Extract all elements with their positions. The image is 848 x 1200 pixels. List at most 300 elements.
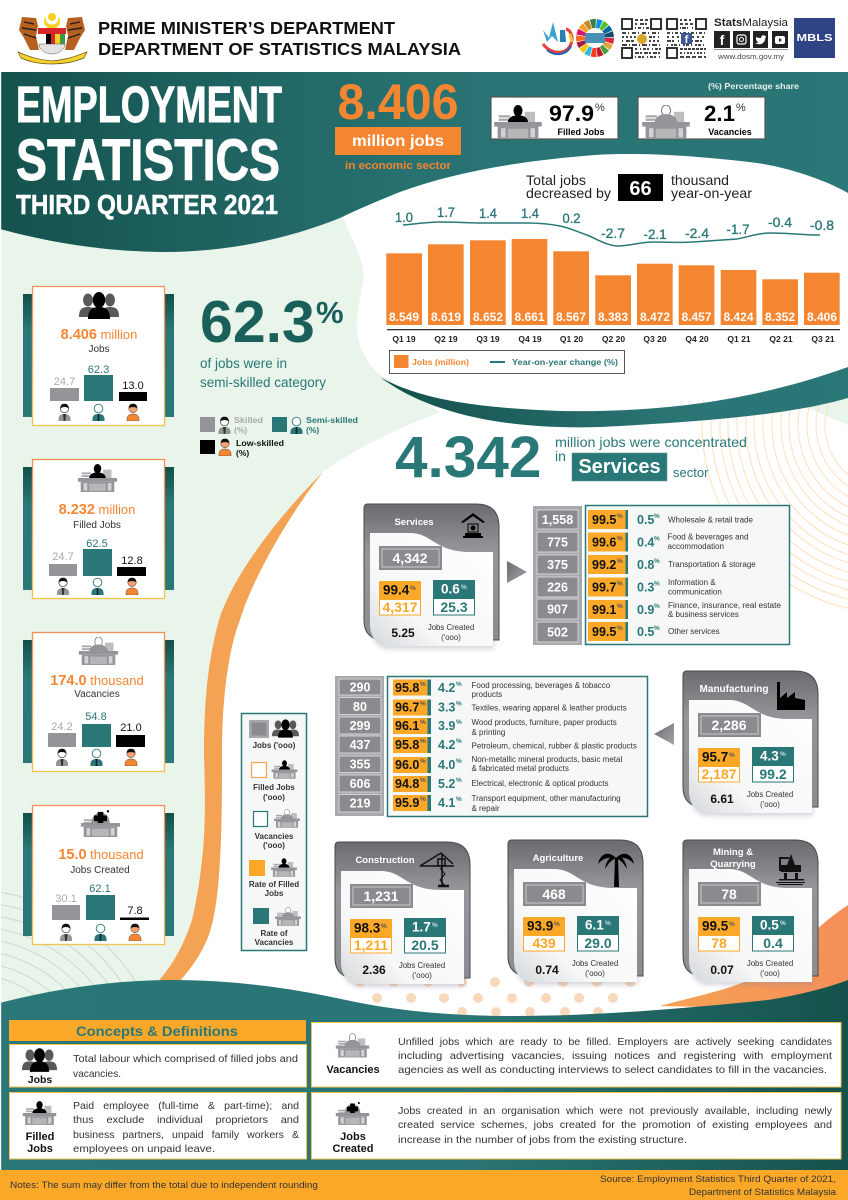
skill legend: (%) xyxy=(236,448,249,458)
card: jobs: 24.7 xyxy=(54,376,75,388)
panel: construction card: 98.3 xyxy=(354,920,381,936)
callout: total jobs decreased: decreased by xyxy=(526,185,611,201)
panel: agriculture card: 468 xyxy=(542,886,566,902)
panel: agriculture card: % xyxy=(605,920,611,927)
callout: semi-skilled share xyxy=(200,289,344,390)
icon: crane xyxy=(420,853,454,886)
panel: services card: 4,342 xyxy=(392,550,428,566)
panel: agriculture card: 93.9 xyxy=(527,918,553,934)
table: services sub-sectors: 0.4 xyxy=(637,536,654,550)
table: manufacturing sub-sectors: Non-metallic mineral products, basic metal xyxy=(472,755,622,764)
definition: filled jobs: Filled xyxy=(26,1131,54,1143)
table: services sub-sectors: % xyxy=(617,536,623,542)
bar chart: jobs by quarter: 8.619 xyxy=(431,312,461,324)
callout: semi-skilled share: 62.3 xyxy=(200,289,315,355)
table: manufacturing sub-sectors: Transport equipment, other manufacturing xyxy=(472,794,621,803)
peach dots xyxy=(355,977,635,1017)
card: jobs: 13.0 xyxy=(122,380,144,392)
chart legend: Jobs (million) xyxy=(412,357,469,367)
table: manufacturing sub-sectors: % xyxy=(420,681,426,688)
chart legend xyxy=(390,350,624,374)
panel: construction card: ('ooo) xyxy=(412,971,432,980)
table: services sub-sectors: communication xyxy=(668,588,722,596)
table: manufacturing sub-sectors: % xyxy=(456,758,462,765)
panel: vacancies share xyxy=(638,97,765,139)
line chart: year-on-year change: 1.0 xyxy=(395,209,413,225)
table: services sub-sectors: Food & beverages and xyxy=(668,532,748,542)
footer band: Notes: The sum may differ from the total due to independent rounding xyxy=(10,1180,318,1191)
definition: jobs created: Jobs xyxy=(340,1131,366,1143)
bar chart: jobs by quarter: Q3 21 xyxy=(811,334,835,344)
table: services sub-sectors: 0.8 xyxy=(637,558,654,572)
table: manufacturing sub-sectors: 96.1 xyxy=(395,719,419,733)
table: manufacturing sub-sectors: 96.0 xyxy=(395,758,419,772)
callout: total jobs decreased: Total jobs xyxy=(526,172,586,188)
table: manufacturing sub-sectors: 96.7 xyxy=(395,700,419,714)
table: services sub-sectors: % xyxy=(654,558,660,565)
table: services jobs column xyxy=(533,506,582,645)
card: jobs created: 15.0 thousand xyxy=(58,847,144,863)
panel: manufacturing card: % xyxy=(780,751,786,758)
card: jobs: 8.406 million xyxy=(61,327,137,343)
definition: jobs created: created service schemes, jobs created for the promotion of existing employees and xyxy=(398,1120,832,1131)
callout: total jobs decreased: year-on-year xyxy=(671,185,752,201)
concepts heading xyxy=(9,1020,306,1041)
card: jobs xyxy=(23,286,174,426)
title: THIRD QUARTER 2021 xyxy=(16,189,278,220)
bar chart: jobs by quarter: 8.549 xyxy=(389,312,419,324)
card: vacancies: 54.8 xyxy=(85,711,107,723)
StatsMalaysia social block xyxy=(714,17,789,61)
definition: jobs: vacancies. xyxy=(73,1069,121,1080)
bar chart: jobs by quarter xyxy=(386,239,840,344)
table: services sub-sectors: % xyxy=(654,513,660,520)
bar chart: jobs by quarter: Q2 20 xyxy=(602,334,625,344)
table: services sub-sectors: % xyxy=(654,580,660,588)
panel: agriculture card: ('ooo) xyxy=(585,969,605,978)
card: vacancies: 24.2 xyxy=(51,721,73,733)
legend: jobs symbols: Filled Jobs xyxy=(253,783,295,792)
table: manufacturing sub-sectors: % xyxy=(456,796,462,803)
panel: mining card xyxy=(683,840,818,982)
definition: filled jobs: Jobs xyxy=(27,1143,53,1155)
light green corner right xyxy=(790,385,848,425)
panel: agriculture card: 439 xyxy=(532,935,556,951)
table: services sub-sectors: % xyxy=(617,580,623,588)
legend: jobs symbols: Rate of Filled xyxy=(249,880,299,889)
legend: jobs symbols: Vacancies xyxy=(255,832,294,841)
line chart: year-on-year change: 1.4 xyxy=(479,205,497,221)
panel: manufacturing card: 2,187 xyxy=(701,766,737,782)
grey concentric arcs xyxy=(0,892,148,1005)
icon: QR code facebook: f xyxy=(685,34,689,46)
panel: vacancies share: % xyxy=(736,102,746,114)
table: manufacturing sub-sectors: & fabricated metal products xyxy=(472,764,569,773)
panel: services card xyxy=(364,504,499,646)
teal swoosh xyxy=(380,367,848,427)
panel: manufacturing card: 4.3 xyxy=(760,748,779,764)
icon: SDG centre xyxy=(585,33,605,43)
table: manufacturing sub-sectors: products xyxy=(472,690,502,699)
icon: QR code facebook xyxy=(667,19,706,58)
definition: jobs created xyxy=(312,1092,841,1159)
skill legend: (%) xyxy=(234,425,247,435)
panel: services card: 99.4 xyxy=(383,582,410,598)
bar chart: jobs by quarter: Q1 20 xyxy=(560,334,583,344)
percentage share note: (%) Percentage share xyxy=(708,81,799,91)
card: filled jobs: 8.232 million xyxy=(59,502,135,518)
line chart: year-on-year change: -2.1 xyxy=(644,226,667,242)
panel: services card: 5.25 xyxy=(391,626,415,640)
bar chart: jobs by quarter: 8.383 xyxy=(598,312,628,324)
footer band: Source: Employment Statistics Third Quarter of 2021, xyxy=(600,1174,836,1185)
callout: services concentration: in xyxy=(555,448,566,464)
table: services sub-sectors: % xyxy=(617,625,623,632)
legend: jobs symbols: Jobs xyxy=(265,889,284,898)
table: services jobs column: 375 xyxy=(547,558,568,572)
icon: coat of arms xyxy=(18,12,87,64)
panel: construction card: 1.7 xyxy=(412,920,431,934)
table: manufacturing sub-sectors: % xyxy=(456,738,462,745)
panel: services card: Jobs Created xyxy=(428,623,474,632)
icon: vision logo xyxy=(543,22,572,54)
table: manufacturing sub-sectors: 95.9 xyxy=(395,796,419,810)
table: manufacturing sub-sectors: % xyxy=(420,796,426,803)
definition: filled jobs: Paid employee (full-time & part-time); and xyxy=(73,1101,299,1112)
table: manufacturing sub-sectors: % xyxy=(456,777,462,784)
icon: MBLS logo: MBLS xyxy=(796,32,832,44)
line chart: year-on-year change: 1.4 xyxy=(521,205,539,221)
panel: vacancies share: Vacancies xyxy=(708,127,752,137)
table: manufacturing sub-sectors: 4.0 xyxy=(438,758,455,772)
definition: vacancies: agencies as well as conducting interviews to select candidates to fill in the vacancies. xyxy=(398,1065,827,1076)
headline jobs number: million jobs xyxy=(352,133,444,150)
panel: manufacturing card: ('ooo) xyxy=(760,800,780,809)
panel: construction card: 2.36 xyxy=(362,963,386,977)
table: manufacturing sub-sectors: & repair xyxy=(472,804,500,813)
table: services jobs column: 1,558 xyxy=(542,513,573,527)
bar chart: jobs by quarter: 8.352 xyxy=(765,312,795,324)
skill legend: (%) xyxy=(306,425,319,435)
footer band: Department of Statistics Malaysia xyxy=(689,1187,837,1198)
panel: manufacturing card: 6.61 xyxy=(710,792,734,806)
table: manufacturing sub-sectors: % xyxy=(456,719,462,726)
table: services sub-sectors: % xyxy=(654,536,660,542)
table: services sub-sectors: Finance, insurance, real estate xyxy=(668,601,782,610)
table: manufacturing jobs column: 437 xyxy=(350,738,370,752)
table: manufacturing sub-sectors: 95.8 xyxy=(395,681,419,695)
line chart: year-on-year change: -0.4 xyxy=(768,214,792,230)
card: filled jobs: 24.7 xyxy=(52,551,74,563)
panel: mining card: 0.4 xyxy=(763,935,783,951)
panel: services card: % xyxy=(410,585,416,592)
table: services jobs column: 226 xyxy=(547,580,568,594)
bar chart: jobs by quarter: Q2 19 xyxy=(434,334,458,344)
legend: jobs symbols: Vacancies xyxy=(255,938,294,947)
arrow: manufacturing to breakdown xyxy=(654,723,674,745)
panel: construction card: 20.5 xyxy=(411,937,439,953)
title: EMPLOYMENT xyxy=(16,76,282,133)
definition: filled jobs xyxy=(10,1092,306,1159)
card: vacancies: 174.0 thousand xyxy=(50,673,144,689)
definition: vacancies xyxy=(312,1022,841,1087)
top teal banner xyxy=(0,72,848,252)
table: services sub-sectors: 99.2 xyxy=(592,558,616,572)
table: manufacturing sub-sectors: Electrical, electronic & optical products xyxy=(472,779,608,788)
line chart: year-on-year change: 0.2 xyxy=(562,210,581,226)
table: manufacturing sub-sectors: 94.8 xyxy=(395,777,419,791)
title: STATISTICS xyxy=(16,128,280,193)
panel: mining card: 0.07 xyxy=(710,963,734,977)
table: services sub-sectors: 99.5 xyxy=(592,625,616,639)
panel: agriculture card: Jobs Created xyxy=(572,959,618,968)
legend: jobs symbols: Jobs ('ooo) xyxy=(253,741,296,750)
panel: agriculture card: 29.0 xyxy=(584,935,612,951)
header title xyxy=(98,18,461,59)
table: manufacturing sub-sectors: 3.9 xyxy=(438,719,455,733)
panel: manufacturing card xyxy=(683,671,818,813)
table: manufacturing sub-sectors: % xyxy=(420,700,426,708)
table: manufacturing sub-sectors: 95.8 xyxy=(395,738,419,752)
table: services sub-sectors: % xyxy=(617,513,623,520)
bar chart: jobs by quarter: Q3 19 xyxy=(476,334,500,344)
callout: services concentration: sector xyxy=(673,465,709,480)
definition: jobs created: increase in the number of jobs from the existing structure. xyxy=(398,1135,687,1146)
panel: filled jobs share xyxy=(491,97,618,139)
line chart: year-on-year change: -0.8 xyxy=(810,217,834,233)
table: services sub-sectors: 0.3 xyxy=(637,580,654,594)
footer band xyxy=(0,1170,848,1200)
table: manufacturing sub-sectors: Petroleum, chemical, rubber & plastic products xyxy=(472,742,637,750)
card: jobs created: 62.1 xyxy=(89,883,111,895)
table: manufacturing sub-sectors: & printing xyxy=(472,728,505,737)
table: manufacturing jobs column: 80 xyxy=(353,700,367,714)
table: manufacturing sub-sectors: 3.3 xyxy=(438,700,455,714)
orange bump bottom right xyxy=(660,905,848,1010)
definition: filled jobs: business partners, unpaid family workers & xyxy=(73,1130,299,1141)
bar chart: jobs by quarter: Q1 21 xyxy=(727,334,751,344)
legend: jobs symbols: Rate of xyxy=(260,929,288,938)
definition: jobs created: Created xyxy=(333,1143,373,1155)
panel: mining card: 0.5 xyxy=(760,918,779,932)
table: services jobs column: 907 xyxy=(547,602,568,616)
definition: vacancies: including advertising vacancies, issuing notices and registering with employment xyxy=(398,1051,832,1062)
table: manufacturing sub-sectors: 4.2 xyxy=(438,738,455,752)
table: services sub-sectors: Wholesale & retail trade xyxy=(668,516,753,524)
panel: construction card: Jobs Created xyxy=(399,961,445,970)
definition: jobs xyxy=(10,1044,306,1087)
callout: total jobs decreased xyxy=(526,172,752,201)
icon: MBLS logo xyxy=(794,18,835,58)
card: jobs created: 30.1 xyxy=(55,893,77,905)
callout: services concentration: million jobs were concentrated xyxy=(555,434,747,450)
card: filled jobs: 62.5 xyxy=(86,538,108,550)
definition: vacancies: Unfilled jobs which are ready to be filled. Employers are actively seeking candidates xyxy=(398,1037,832,1048)
table: manufacturing sub-sectors: 4.1 xyxy=(438,796,455,810)
table: services sub-sectors: 99.5 xyxy=(592,513,616,527)
table: manufacturing sub-sectors: Textiles, wearing apparel & leather products xyxy=(472,704,627,712)
skill legend: Semi-skilled xyxy=(306,415,358,425)
peach concentric arcs xyxy=(702,400,848,608)
icon: QR code website xyxy=(622,19,661,58)
header title: DEPARTMENT OF STATISTICS MALAYSIA xyxy=(98,39,461,59)
panel: mining card: % xyxy=(780,920,786,927)
headline jobs number: in economic sector xyxy=(345,160,452,172)
table: services sub-sectors: Information & xyxy=(668,578,716,587)
callout: semi-skilled share: of jobs were in xyxy=(200,356,287,371)
orange wave band xyxy=(150,472,323,990)
table: manufacturing sub-sectors: 4.2 xyxy=(438,681,455,695)
table: manufacturing jobs column: 606 xyxy=(350,777,370,791)
bar chart: jobs by quarter: Q2 21 xyxy=(769,334,793,344)
bar chart: jobs by quarter: Q4 20 xyxy=(685,334,709,344)
panel: services card: Services xyxy=(394,517,434,528)
table: manufacturing jobs column: 290 xyxy=(350,680,370,694)
table: manufacturing jobs column: 355 xyxy=(350,758,370,772)
table: manufacturing sub-sectors: % xyxy=(420,777,426,784)
panel: services card: % xyxy=(461,584,467,591)
panel: agriculture card: Agriculture xyxy=(533,853,583,864)
table: services sub-sectors: accommodation xyxy=(668,542,724,551)
icon: oil rig xyxy=(776,854,805,885)
bar chart: jobs by quarter: 8.424 xyxy=(724,312,754,324)
table: manufacturing sub-sectors: % xyxy=(456,700,462,708)
table: manufacturing sub-sectors xyxy=(388,676,648,816)
concepts heading: Concepts & Definitions xyxy=(76,1023,238,1039)
callout: semi-skilled share: % xyxy=(316,295,344,330)
icon: SDG wheel xyxy=(575,18,615,58)
table: services sub-sectors: % xyxy=(654,603,660,610)
bar chart: jobs by quarter: 8.661 xyxy=(514,312,545,324)
bar chart: jobs by quarter: 8.567 xyxy=(556,312,586,324)
card: vacancies: Vacancies xyxy=(74,689,120,700)
table: manufacturing sub-sectors: % xyxy=(420,738,426,745)
table: services sub-sectors: 99.1 xyxy=(592,603,616,617)
table: services sub-sectors xyxy=(586,506,790,644)
table: services sub-sectors: 99.7 xyxy=(592,580,616,594)
panel: services card: ('ooo) xyxy=(441,633,461,642)
table: manufacturing jobs column xyxy=(335,676,384,816)
panel: construction card: 1,211 xyxy=(354,937,388,953)
icon: palm tree xyxy=(598,854,634,887)
table: services sub-sectors: 0.5 xyxy=(637,513,654,527)
callout: services concentration: 4.342 xyxy=(395,425,541,490)
icon: services house xyxy=(461,513,485,538)
panel: manufacturing card: % xyxy=(729,752,735,759)
table: manufacturing sub-sectors: % xyxy=(420,719,426,726)
panel: agriculture card xyxy=(508,840,643,982)
bar chart: jobs by quarter: 8.406 xyxy=(807,312,837,324)
panel: filled jobs share: 97.9 xyxy=(549,101,594,126)
table: services sub-sectors: % xyxy=(617,558,623,565)
background light green shape xyxy=(0,200,440,1010)
table: services sub-sectors: Other services xyxy=(668,627,720,636)
definition: jobs created: Jobs created in an organisation which were not previously available, including newly xyxy=(398,1106,833,1117)
card: jobs created: 7.8 xyxy=(127,905,143,917)
panel: manufacturing card: 99.2 xyxy=(759,766,787,782)
panel: mining card: Quarrying xyxy=(710,859,756,870)
definition: jobs: Jobs xyxy=(28,1074,52,1086)
definition: filled jobs: employees on unpaid leave. xyxy=(73,1144,215,1155)
StatsMalaysia social block: StatsMalaysia xyxy=(714,17,789,29)
panel: manufacturing card: Manufacturing xyxy=(700,684,768,695)
panel: mining card: ('ooo) xyxy=(760,969,780,978)
line chart: year-on-year change: -2.4 xyxy=(685,225,709,241)
card: jobs created: Jobs Created xyxy=(70,865,130,876)
line chart: year-on-year change xyxy=(395,204,834,246)
definition: jobs: Total labour which comprised of filled jobs and xyxy=(73,1054,298,1065)
panel: filled jobs share: Filled Jobs xyxy=(557,127,605,137)
title xyxy=(16,76,282,220)
card: jobs created xyxy=(23,806,174,944)
StatsMalaysia social block: www.dosm.gov.my xyxy=(717,54,785,61)
table: services sub-sectors: 99.6 xyxy=(592,536,616,550)
legend: jobs symbols: ('ooo) xyxy=(263,841,285,850)
panel: services card: 0.6 xyxy=(441,582,460,596)
icon: factory xyxy=(777,682,805,710)
panel: manufacturing card: Jobs Created xyxy=(747,790,793,799)
skill legend xyxy=(200,415,358,458)
headline jobs number xyxy=(335,74,461,172)
skill legend: Skilled xyxy=(234,415,263,425)
table: services sub-sectors: 0.9 xyxy=(637,603,654,617)
panel: construction card: % xyxy=(432,922,438,929)
header title: PRIME MINISTER’S DEPARTMENT xyxy=(98,18,395,38)
chart legend: Year-on-year change (%) xyxy=(512,357,618,367)
panel: agriculture card: 0.74 xyxy=(535,963,559,977)
panel: construction card: % xyxy=(381,923,387,930)
panel: mining card: % xyxy=(729,921,735,928)
panel: agriculture card: 6.1 xyxy=(585,918,604,932)
bar chart: jobs by quarter: 8.472 xyxy=(640,312,670,324)
table: manufacturing jobs column: 219 xyxy=(350,796,370,810)
bar chart: jobs by quarter: 8.457 xyxy=(682,312,712,324)
table: manufacturing jobs column: 299 xyxy=(350,719,370,733)
definition: vacancies: Vacancies xyxy=(326,1064,380,1076)
legend: jobs symbols: ('ooo) xyxy=(263,793,285,802)
table: manufacturing sub-sectors: % xyxy=(420,758,426,765)
table: services jobs column: 775 xyxy=(547,536,568,550)
table: services sub-sectors: & business services xyxy=(668,610,739,619)
legend: jobs symbols xyxy=(242,714,306,950)
table: services sub-sectors: % xyxy=(617,603,623,610)
card: vacancies: 21.0 xyxy=(120,722,142,734)
bar chart: jobs by quarter: Q4 19 xyxy=(518,334,542,344)
panel: mining card: 99.5 xyxy=(702,918,729,934)
panel: agriculture card: % xyxy=(554,921,560,928)
panel: mining card: Mining & xyxy=(713,847,753,858)
panel: manufacturing card: 95.7 xyxy=(702,750,728,764)
panel: vacancies share: 2.1 xyxy=(704,101,735,126)
table: manufacturing sub-sectors: Wood products, furniture, paper products xyxy=(472,718,617,727)
definition: filled jobs: thus exclude individual proprietors and xyxy=(73,1115,299,1126)
callout: semi-skilled share: semi-skilled category xyxy=(200,375,326,390)
panel: manufacturing card: 2,286 xyxy=(711,717,747,733)
bar chart: jobs by quarter: 8.652 xyxy=(473,312,503,324)
table: services sub-sectors: 0.5 xyxy=(637,625,654,639)
callout: total jobs decreased: 66 xyxy=(629,178,652,200)
line chart: year-on-year change: -1.7 xyxy=(726,221,750,237)
table: manufacturing sub-sectors: 5.2 xyxy=(438,777,455,791)
panel: construction card: 1,231 xyxy=(363,888,399,904)
callout: services concentration xyxy=(395,425,747,490)
table: manufacturing sub-sectors: Food processing, beverages & tobacco xyxy=(472,681,611,690)
panel: construction card: Construction xyxy=(355,855,415,866)
bar chart: jobs by quarter: Q3 20 xyxy=(643,334,667,344)
panel: filled jobs share: % xyxy=(595,102,605,114)
panel: services card: 25.3 xyxy=(440,599,468,615)
left edge strip xyxy=(0,72,1,1170)
